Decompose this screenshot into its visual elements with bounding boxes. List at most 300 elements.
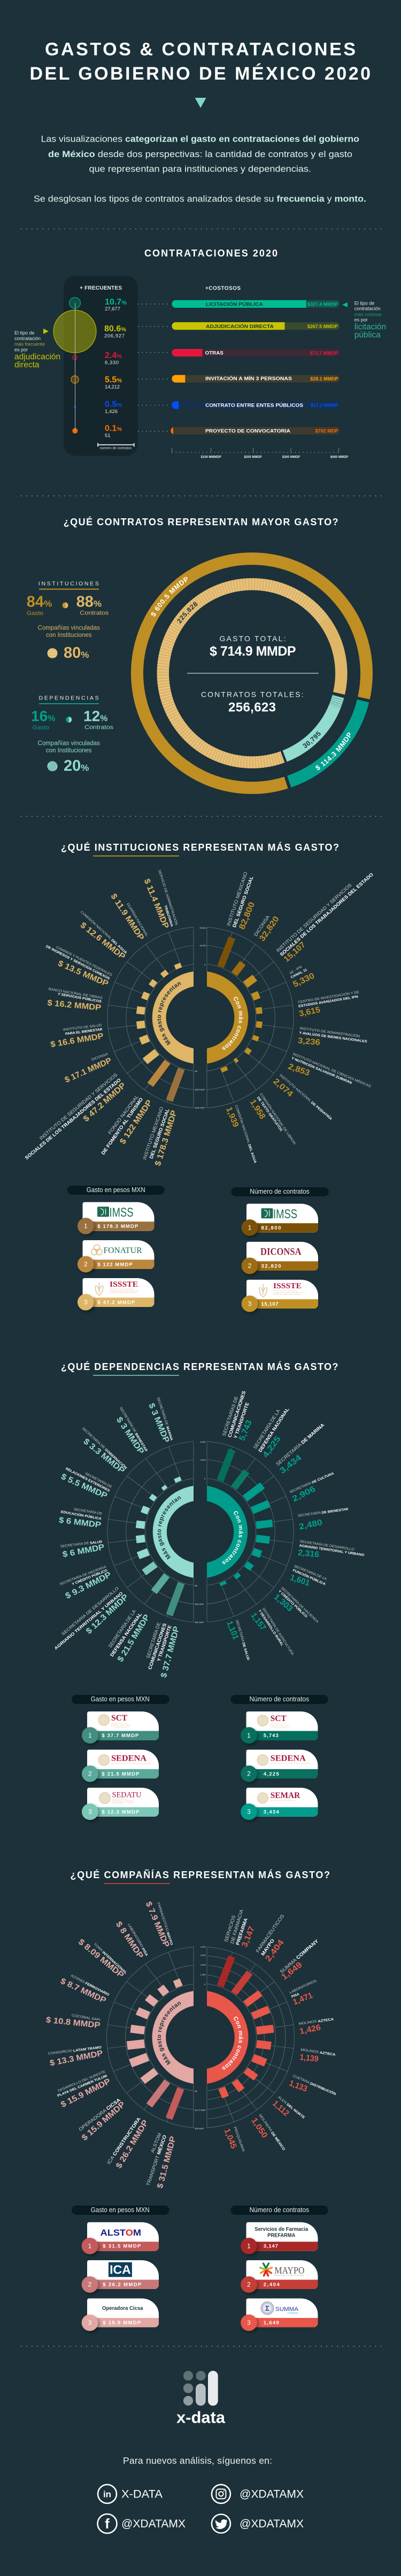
intro text <box>34 134 366 204</box>
label: pisa contratos: PISA <box>291 1993 300 1999</box>
panel: instituciones stats: 80% <box>64 644 89 661</box>
card: ISSSTE gasto <box>78 1278 154 1312</box>
logo: FONATUR <box>91 1245 142 1255</box>
label: CINVESTAV: 3,615 <box>298 1005 321 1018</box>
label: CAPUFE: $ 13.5 MMDP <box>57 959 110 989</box>
connectors <box>138 304 170 431</box>
label: ISSSTE gasto: SOCIALES DE LOS TRABAJADORES DEL ESTADO <box>24 1077 122 1161</box>
card: Operadora Cicsa gasto: 3 <box>88 2319 92 2326</box>
panel: dependencias stats <box>31 695 114 775</box>
label: maypo: FARMACÉUTICOS <box>255 1913 286 1954</box>
center strip: 8,000 <box>200 1441 206 1443</box>
label: agua gasto: COMISIÓN NACIONAL DEL AGUA <box>80 909 129 955</box>
label: SEDENA gasto <box>107 1609 152 1663</box>
donut captions: Más gasto representan <box>157 1496 181 1560</box>
panel: instituciones stats: Gasto <box>27 610 43 617</box>
label: prefarma <box>223 1909 257 1949</box>
ring labels: 225,828 <box>178 602 198 624</box>
label: INCMNSZ: INSTITUTO NACIONAL DE CIENCIAS MÉDICAS <box>292 1052 372 1088</box>
radial chart: dependencias <box>53 1390 365 1679</box>
logo: Summa: SUMMA <box>275 2306 299 2313</box>
card: Prefarma contratos: 1 <box>247 2243 251 2250</box>
label: educación <box>58 1507 103 1530</box>
label: función pública <box>289 1563 328 1588</box>
label: XE-IPN: CANAL 11 <box>290 968 308 979</box>
label: ISSSTE gasto: $ 47.2 MMDP <box>82 1081 128 1124</box>
pill: contratos compañías <box>230 2206 328 2215</box>
logo: ISSSTE <box>259 1282 303 1297</box>
social: linkedin <box>98 2485 163 2503</box>
center strip: $100 MDP <box>195 1088 205 1091</box>
callout: más frecuente: El tipo de <box>14 330 35 336</box>
panel: instituciones stats: INSTITUCIONES <box>38 581 99 587</box>
bar: otras <box>172 349 340 356</box>
label: bienestar contratos: SECRETARÍA DE BIENESTAR <box>297 1506 349 1518</box>
logo: Prefarma <box>255 2227 309 2238</box>
percentages: 14,212 <box>105 384 120 390</box>
labels: gasto instituciones <box>24 869 179 1167</box>
center strip: $20 MDP <box>195 1603 204 1605</box>
pill: contratos instituciones: Número de contratos <box>250 1188 310 1195</box>
label: SEDENA gasto: $ 21.5 MMDP <box>116 1613 152 1663</box>
panel: dependencias stats: DEPENDENCIAS <box>38 695 98 702</box>
pill: gasto compañías <box>72 2206 169 2215</box>
logo: SEDENA: SEDENA <box>271 1754 306 1763</box>
card: ICA gasto: 2 <box>88 2281 92 2289</box>
axis: $200 MMDP <box>244 456 262 459</box>
center strip: 90,000 <box>199 927 206 929</box>
label: SEDENA contratos: DEFENSA NACIONAL <box>257 1406 290 1453</box>
label: DICONSA gasto: DICONSA <box>91 1052 109 1062</box>
ring labels: 30,795 <box>303 731 321 748</box>
title: GASTOS & CONTRATACIONES <box>45 39 356 59</box>
label: tora: $ 8.09 MMDP <box>76 1937 126 1980</box>
title <box>30 39 371 84</box>
pill: contratos instituciones <box>231 1187 329 1196</box>
label: prefarma: DE FARMACIA <box>229 1909 244 1944</box>
label: XE-IPN <box>289 965 316 989</box>
card: Summa contratos: 1,649 <box>264 2320 279 2326</box>
label: DICONSA contratos <box>253 914 281 943</box>
logo: SCT: SCT <box>271 1714 287 1723</box>
label: ISSSTE gasto: INSTITUTO DE SEGURIDAD Y SERVICIOS <box>38 1072 119 1141</box>
bar: licitación pública <box>172 300 340 308</box>
label: molinera: 1,050 <box>249 2116 269 2140</box>
label: cultura <box>289 1470 335 1504</box>
labels: contratos instituciones <box>224 871 374 1164</box>
logo: Maypo <box>260 2263 304 2276</box>
label: maypo <box>255 1913 286 1964</box>
card: SEMAR contratos: 3 <box>247 1808 251 1816</box>
grid and bars <box>107 927 294 1108</box>
label: SEDATU contratos: SECRETARÍA DE DESARROLLO <box>299 1539 354 1552</box>
label: función pública: 1,601 <box>289 1573 311 1588</box>
callout: más costosa: es por <box>354 317 368 323</box>
label: SEDENA contratos: SECRETARÍA DE LA <box>252 1408 281 1450</box>
logo: SEMAR <box>257 1791 300 1803</box>
card: IMSS contratos: 82,800 <box>261 1225 281 1231</box>
center strip: $0 <box>195 2090 198 2092</box>
social: facebook: f <box>105 2516 110 2532</box>
ring: contratos instituciones <box>163 584 341 762</box>
logo: SEDATU: SECRETARÍA DE <box>112 1798 127 1800</box>
label: marina gasto <box>146 1397 175 1444</box>
card: ISSSTE gasto: $ 47.2 MMDP <box>97 1299 135 1306</box>
label: pisa contratos <box>289 1979 317 2007</box>
donut captions <box>157 2002 244 2070</box>
label: hacienda gasto: Y CRÉDITO PÚBLICO <box>71 1568 108 1586</box>
logo: SEDATU: TERRITORIAL Y URBANO <box>112 1802 135 1804</box>
label: proquigama <box>222 2126 245 2153</box>
card: ISSSTE contratos: 3 <box>248 1300 252 1308</box>
axis: $400 MMDP <box>330 456 348 459</box>
donut captions: Más gasto representan <box>157 2002 181 2065</box>
panel: instituciones stats: Compañías vinculadas <box>38 625 100 632</box>
label: desarrollo del sureste: DESARROLLO DEL SURESTE <box>57 2070 106 2093</box>
card: SEDENA gasto <box>82 1749 159 1784</box>
scale marker: número de contratos <box>100 447 132 450</box>
label: SCT contratos: Y TRANSPORTE <box>233 1402 250 1439</box>
label: latam: $ 13.3 MMDP <box>49 2049 104 2068</box>
axis: $100 MMMDP <box>201 456 221 459</box>
label: SAT: SERVICIO DE ADMINISTRACIÓN <box>157 869 179 926</box>
label: educación: $ 6 MMDP <box>58 1516 102 1530</box>
card: FONATUR gasto: $ 122 MMDP <box>97 1262 133 1267</box>
label: hacienda contratos: SECRETARÍA DE HACIENDA <box>280 1585 320 1624</box>
social: instagram: @XDATAMX <box>240 2488 304 2501</box>
center strip: 0 <box>204 1983 206 1986</box>
percentages: 27,677 <box>105 306 120 312</box>
icon: down triangle <box>195 98 206 108</box>
label: latam: CONSORCIO LATAM TRAMO <box>48 2045 102 2056</box>
card: ALSTOM gasto <box>82 2222 159 2256</box>
labels: gasto dependencias <box>53 1397 181 1679</box>
logo: Maypo: Competitivos en productos de salud <box>275 2274 304 2276</box>
social: facebook: @XDATAMX <box>121 2518 186 2530</box>
bar chart: tipos de contrato <box>171 300 348 459</box>
center totals: CONTRATOS TOTALES: <box>201 690 304 699</box>
card: SEDATU gasto <box>82 1788 159 1822</box>
label: ica <box>106 2116 150 2170</box>
social: facebook <box>97 2514 186 2533</box>
label: cicsa: OPERADORA CICSA <box>78 2097 121 2132</box>
percentages: 0.1% <box>105 424 122 433</box>
heading: instituciones: ¿QUÉ INSTITUCIONES REPRESENTAN MÁS GASTO? <box>61 842 339 853</box>
card: SEDATU gasto: $ 12.3 MMDP <box>102 1809 140 1815</box>
label: CAPUFE <box>45 945 113 989</box>
social: twitter: @XDATAMX <box>240 2518 304 2530</box>
card: ICA gasto: $ 26.2 MMDP <box>103 2282 142 2287</box>
donut captions <box>157 982 244 1050</box>
label: summa: 1,649 <box>280 1960 304 1982</box>
center totals: 256,623 <box>228 700 276 714</box>
bar: invitación: $28.1 MMDP <box>310 376 338 382</box>
label: relaciones exteriores <box>59 1467 113 1501</box>
center strip: 3,000 <box>200 1459 206 1461</box>
ring labels: $ 114.3 MMDP <box>315 732 351 771</box>
card: SEDATU gasto: 3 <box>88 1808 92 1816</box>
label: SEMAR contratos: SECRETARÍA DE MARINA <box>275 1422 326 1467</box>
percentages: 6,330 <box>105 360 119 366</box>
label: tora: TORA INTERNACIONAL <box>93 1942 128 1975</box>
bar: contrato entre entes públicos: $17.2 MMDP <box>311 403 338 408</box>
label: guardia nacional: $ 11.9 MMDP <box>109 892 145 942</box>
pill: gasto instituciones <box>67 1186 165 1195</box>
center strip: 1,000 <box>200 1973 206 1976</box>
label: alen: 1,112 <box>271 2099 291 2118</box>
logo: x-data <box>176 2371 226 2427</box>
logo: IMSS: IMSS <box>109 1205 134 1220</box>
label: SAT <box>142 869 179 930</box>
label: SEDATU contratos: AGRIARIO TERRITORIAL Y URBANO <box>299 1544 365 1557</box>
label: azvindi: AZVINDI FERROVIARIO <box>70 1974 110 1997</box>
card: Maypo contratos <box>241 2260 318 2294</box>
logo: Prefarma: PREFARMA <box>267 2232 295 2238</box>
panel: instituciones stats: 88% <box>76 594 102 611</box>
label: CAPUFE: CAMINOS Y PUENTES FEDERALES <box>56 945 113 977</box>
donut captions: Con más contratos <box>222 1511 244 1565</box>
callout: más costosa: contratación <box>354 306 381 312</box>
card: Summa contratos <box>241 2299 318 2332</box>
card: FONATUR gasto: 2 <box>84 1260 88 1268</box>
label: SEDATU gasto: $ 12.3 MMDP <box>84 1592 130 1636</box>
center strip: 40,000 <box>199 944 206 947</box>
follow text: Para nuevos análisis, síguenos en: <box>123 2455 272 2466</box>
center strip: $0 <box>195 1070 198 1072</box>
logo: IMSS: IMSS <box>273 1207 297 1221</box>
callout: más costosa: más costosa <box>354 312 381 317</box>
half donut: más contratos <box>207 971 248 1064</box>
label: relaciones exteriores: SECRETARÍA DE <box>84 1471 113 1489</box>
percentages: 1,426 <box>105 409 118 415</box>
label: CAPUFE: DE INGRESOS Y SERVICIOS CONEXOS <box>45 945 111 981</box>
label: XE-IPN: XE - IPN <box>289 965 303 976</box>
label: guardia nacional: GUARDIA NACIONAL <box>126 902 149 938</box>
heading: dependencias: ¿QUÉ DEPENDENCIAS REPRESENTAN MÁS GASTO? <box>61 1361 338 1372</box>
label: IMSS gasto: $ 178.3 MMDP <box>153 1109 179 1167</box>
label: salud gasto: $ 6 MMDP <box>62 1543 105 1559</box>
ring labels <box>151 577 351 771</box>
axis: $300 MMDP <box>282 456 300 459</box>
logo: SEMAR: SEMAR <box>271 1791 300 1800</box>
label: cultura: SECRETARÍA DE CULTURA <box>289 1470 335 1494</box>
label: gobernación: $ 3.3 MMDP <box>81 1437 126 1475</box>
center strip: $17.5 MDP <box>195 2108 206 2112</box>
label: desarrollo del sureste: PLAYA DEL CARMEN TULUM <box>57 2074 107 2098</box>
label: azvindi: $ 8.7 MMDP <box>59 1976 107 2005</box>
card: Prefarma contratos: 3,147 <box>264 2244 278 2250</box>
logo: Summa <box>261 2302 299 2315</box>
logo: IMSS <box>97 1205 134 1220</box>
logo: SCT: SCT <box>111 1714 127 1723</box>
logo: Prefarma: Servicios de Farmacia <box>255 2227 309 2232</box>
label: SEDATU gasto: SECRETARÍA DE DESARROLLO <box>60 1586 120 1637</box>
card: ISSSTE contratos: 15,107 <box>261 1302 278 1307</box>
heading: contrataciones 2020: CONTRATACIONES 2020 <box>144 248 277 259</box>
panel: dependencias stats: 20% <box>64 758 89 775</box>
label: proquigama: PROQUIGAMA <box>233 2126 245 2153</box>
label: FONATUR gasto: DE FOMENTO AL TURISMO <box>101 1096 144 1156</box>
panel: más frecuentes <box>53 276 138 456</box>
half donut: más contratos <box>207 1486 248 1578</box>
card: IMSS gasto <box>78 1202 154 1236</box>
label: SCT gasto: COMUNICACIONES <box>147 1623 167 1670</box>
scale marker <box>98 443 134 450</box>
label: salud contratos <box>225 1619 251 1661</box>
label: alstom: ALSTOM <box>150 2132 163 2153</box>
grid and bars <box>107 1947 294 2128</box>
label: INDAABIN: INSTITUTO DE ADMINISTRACIÓN <box>299 1025 360 1039</box>
center strip <box>194 1944 207 2130</box>
label: pisa contratos: 1,471 <box>291 1991 314 2007</box>
donut captions <box>157 1496 244 1565</box>
pill: gasto dependencias: Gasto en pesos MXN <box>91 1695 150 1703</box>
center strip: $180 MDP <box>195 1106 205 1109</box>
card: Operadora Cicsa gasto <box>82 2299 159 2332</box>
label: IMSS gasto: INSTITUTO MEXICANO <box>142 1106 164 1161</box>
callout: más costosa <box>342 301 386 340</box>
label: molinos 1 <box>298 2017 334 2036</box>
ring: gasto dependencias <box>289 701 363 782</box>
bar: invitación <box>172 375 340 383</box>
label: alstom: TRANSPORT MÉXICO <box>145 2134 167 2186</box>
label: alen: ALEN DEL NORTE <box>277 2096 306 2120</box>
label: molinera: MOLINERA DE MÉXICO <box>258 2113 287 2151</box>
label: bienestar contratos: 2,480 <box>298 1518 323 1532</box>
panel: dependencias stats: con Instituciones <box>46 748 92 754</box>
label: SCT contratos: 5,743 <box>237 1419 254 1442</box>
label: hacienda gasto: $ 9.3 MMDP <box>64 1570 113 1601</box>
bar: adjudicación directa <box>172 322 340 330</box>
logo: FONATUR: FONATUR <box>104 1246 142 1255</box>
label: BANOBRAS: Y SERVICIOS PÚBLICOS <box>57 991 102 1004</box>
line: timeline <box>75 303 76 431</box>
label: IMSS contratos: DEL SEGURO SOCIAL <box>232 875 255 928</box>
pill: contratos dependencias: Número de contratos <box>250 1695 309 1703</box>
logo: SEDENA: SEDENA <box>111 1754 146 1763</box>
label: DICONSA contratos: 32,820 <box>258 915 281 943</box>
center totals: $ 714.9 MMDP <box>210 644 296 659</box>
percentages: 206,927 <box>104 333 125 339</box>
bar: invitación: INVITACIÓN A MÍN 3 PERSONAS <box>205 376 292 382</box>
label: pisa gasto: $ 8 MMDP <box>114 1920 145 1960</box>
logo: ISSSTE: TRABAJADORES DEL ESTADO <box>273 1293 301 1295</box>
label: coconal: $ 10.8 MMDP <box>45 2015 101 2030</box>
pill: gasto instituciones: Gasto en pesos MXN <box>87 1186 145 1194</box>
label: molinos 2: 1,139 <box>299 2053 319 2064</box>
donut captions: Con más contratos <box>222 2017 244 2070</box>
center strip <box>194 1439 207 1624</box>
icon: half circle <box>62 602 68 608</box>
card: SCT contratos: 1 <box>247 1732 251 1739</box>
radial chart: instituciones <box>24 869 374 1167</box>
label: DICONSA contratos: DICONSA <box>253 914 271 937</box>
bar: proyecto de convocatoria: PROYECTO DE CONVOCATORIA <box>205 428 290 434</box>
logo: SEDATU <box>99 1791 142 1804</box>
label: alen <box>271 2096 306 2120</box>
label: hacienda contratos: 1,303 <box>272 1592 295 1614</box>
card: DICONSA contratos <box>242 1242 318 1275</box>
intro text: que representan para instituciones y dependencias. <box>89 164 311 174</box>
logo: ISSSTE: TRABAJADORES DEL ESTADO <box>110 1291 137 1294</box>
callout: más frecuente: contratación <box>14 336 41 341</box>
bar: proyecto de convocatoria: $702 MDP <box>315 429 338 434</box>
label: hacienda gasto: SECRETARÍA DE HACIENDA <box>59 1564 107 1586</box>
logo: Summa: Σ <box>265 2304 269 2313</box>
label: BANOBRAS: $ 16.2 MMDP <box>47 999 102 1013</box>
label: IMSS gasto: DEL SEGURO SOCIAL <box>149 1108 171 1159</box>
donut captions: Con más contratos <box>222 997 244 1050</box>
logo: Operadora Cicsa: Operadora Cicsa <box>102 2306 143 2312</box>
label: CINVESTAV: ESTUDIOS AVANZADOS DEL IPN <box>298 995 359 1008</box>
label: bienestar gasto: SECRETARÍA DE BIENESTAR <box>119 1406 149 1452</box>
callout: más frecuente <box>14 329 60 369</box>
center totals: GASTO TOTAL: <box>219 634 286 643</box>
label: XE-IPN: 5,330 <box>291 971 316 989</box>
label: coconal: COCONAL SAPI <box>71 2014 101 2022</box>
social: instagram <box>212 2485 304 2503</box>
label: SAT: $ 11.4 MMDP <box>142 877 171 930</box>
callout: más frecuente: directa <box>14 360 40 369</box>
label: libros de texto: COMISIÓN NACIONAL DE LIBROS <box>259 1092 297 1146</box>
label: pediatría: 2,074 <box>271 1077 295 1099</box>
pill: gasto dependencias <box>72 1695 169 1704</box>
card: SEDENA gasto: $ 21.5 MMDP <box>102 1771 140 1777</box>
label: educación: EDUCACIÓN PÚBLICA <box>60 1509 102 1521</box>
bubbles <box>53 297 96 433</box>
card: ALSTOM gasto: 1 <box>88 2243 92 2250</box>
logo: SEDATU: DESARROLLO AGRARIO, <box>112 1800 135 1802</box>
label: DICONSA gasto: $ 17.1 MMDP <box>64 1056 113 1085</box>
bar: proyecto de convocatoria <box>171 427 340 434</box>
percentages: 80.6% <box>104 324 126 333</box>
bar: licitación pública: LICITACIÓN PÚBLICA <box>206 301 263 308</box>
logo: ISSSTE: INSTITUTO DE SEGURIDAD <box>110 1288 134 1290</box>
label: frecuentes: + FRECUENTES <box>80 285 122 291</box>
percentages: 2.4% <box>105 351 122 360</box>
label: proquigama: 1,045 <box>222 2127 238 2150</box>
half donut: más gasto <box>153 1486 194 1578</box>
logo: SEDATU: SEDATU <box>112 1791 142 1799</box>
label: función pública: SECRETARÍA DE LA <box>294 1563 328 1581</box>
label: INDAABIN: 3,236 <box>297 1036 321 1047</box>
logo: Maypo: MAYPO <box>274 2265 304 2276</box>
label: agua contratos: COMISIÓN NACIONAL DEL AGUA <box>234 1104 258 1164</box>
center strip: $40 MDP <box>195 1621 204 1623</box>
callout: más frecuente: adjudicación <box>14 352 60 361</box>
bar: otras: OTRAS <box>205 350 223 356</box>
logo: SCT: COMUNICACIONES <box>111 1724 130 1726</box>
label: ISSSTE contratos: INSTITUTO DE SEGURIDAD Y SERVICIOS <box>275 882 353 953</box>
card: DICONSA contratos: 2 <box>248 1262 252 1270</box>
bar: contrato entre entes públicos: CONTRATO ENTRE ENTES PÚBLICOS <box>205 402 303 408</box>
center strip: 2,000 <box>200 1963 206 1966</box>
label: prefarma: 3,147 <box>240 1925 257 1949</box>
label: IMSS contratos: 82,800 <box>237 901 257 931</box>
label: INCMNSZ: 2,853 <box>287 1062 311 1078</box>
label: función pública: FUNCIÓN PÚBLICA <box>292 1568 327 1586</box>
callout: más costosa: pública <box>354 331 381 340</box>
bar: contrato entre entes públicos <box>172 401 340 409</box>
label: FONATUR gasto <box>101 1094 154 1156</box>
label: libros de texto: DE TEXTO GRATUITOS <box>256 1096 283 1132</box>
logo: SEDENA: SECRETARÍA DE LA DEFENSA NACIONAL <box>111 1763 152 1765</box>
half donut: más gasto <box>152 971 194 1064</box>
label: CINVESTAV <box>297 990 359 1018</box>
ring: gasto instituciones <box>137 559 366 788</box>
label: molinos 2: MOLINOS AZTECA <box>300 2048 336 2057</box>
percentages: 51 <box>105 433 111 439</box>
